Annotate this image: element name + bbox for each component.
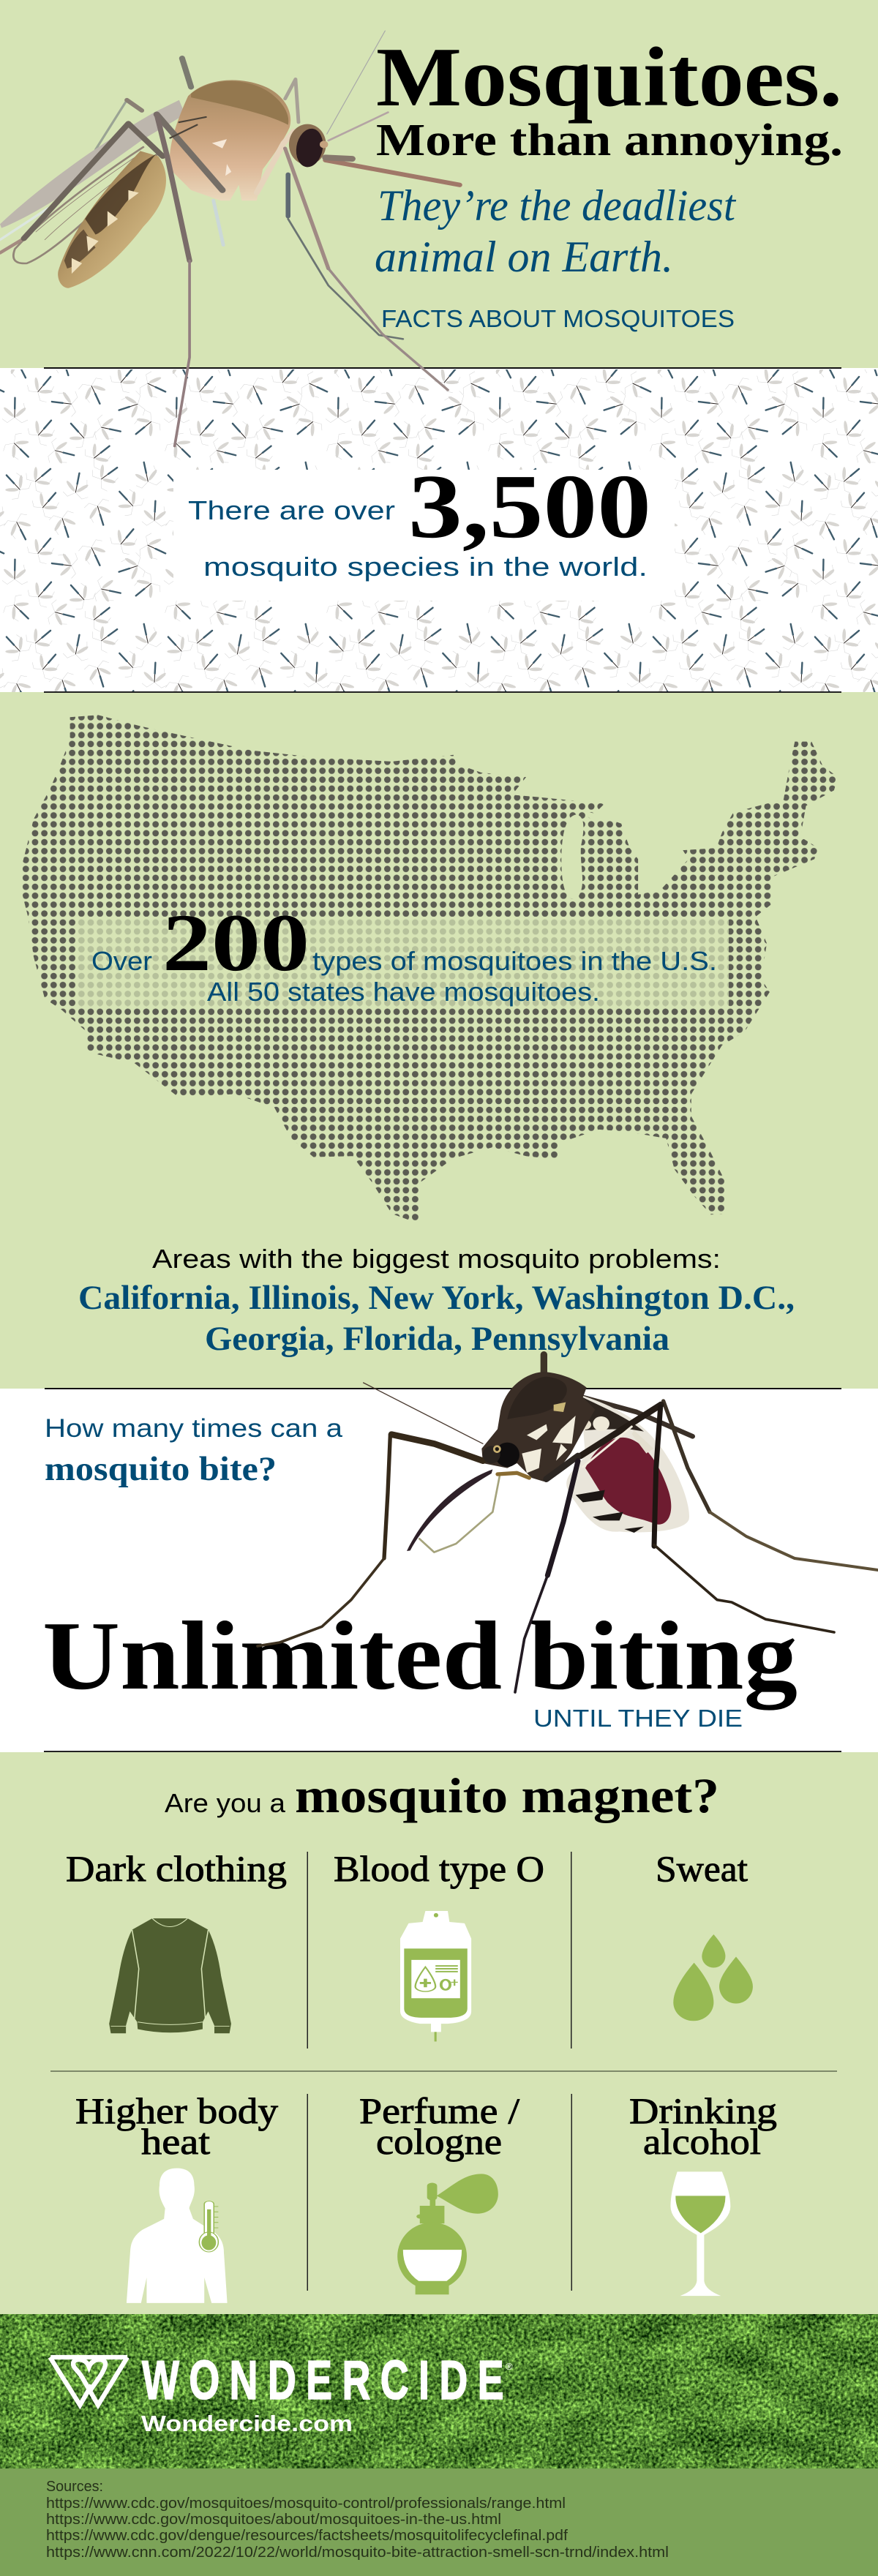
question line 2: mosquito bite? — [45, 1450, 277, 1488]
icon: sweatshirt — [109, 1918, 231, 2033]
tagline line 1: They’re the deadliest — [378, 181, 736, 230]
stat number: 200 — [162, 898, 309, 988]
sources heading: Sources: — [46, 2479, 103, 2495]
label: dark clothing: Dark clothing — [66, 1848, 287, 1889]
stat lead text: Over — [91, 946, 152, 976]
question line 1: How many times can a — [45, 1414, 343, 1443]
icon: blood-fed mosquito photo illustration — [258, 1355, 878, 1692]
heading: mosquito magnet? — [295, 1768, 719, 1823]
source link 2: https://www.cdc.gov/mosquitoes/about/mosquitoes-in-the-us.html — [46, 2512, 501, 2528]
source link 1: https://www.cdc.gov/mosquitoes/mosquito-control/professionals/range.html — [46, 2496, 566, 2512]
logo: Wondercide mark — [50, 2357, 127, 2405]
subtitle: More than annoying. — [376, 116, 843, 165]
label: perfume / cologne — [359, 2090, 519, 2162]
headline: Unlimited biting — [42, 1601, 798, 1711]
rule: below species — [44, 691, 841, 693]
panel: sources — [0, 2468, 878, 2576]
logo: wordmark: WONDERCIDE — [142, 2349, 504, 2411]
label: sweat: Sweat — [656, 1848, 748, 1889]
rule: above biting section — [45, 1388, 841, 1389]
headline suffix: UNTIL THEY DIE — [533, 1705, 743, 1732]
icon: mosquito photo illustration, tan — [0, 31, 459, 446]
rule: below biting section — [44, 1751, 841, 1752]
icon: blood bag — [400, 1911, 471, 2041]
tagline line 2: animal on Earth. — [375, 233, 673, 281]
icon: perfume bottle — [397, 2174, 498, 2294]
label: higher body heat — [75, 2090, 278, 2162]
heading: problem areas: Areas with the biggest mosquito problems: — [152, 1244, 721, 1274]
section label: FACTS ABOUT MOSQUITOES — [381, 305, 735, 332]
title: Mosquitoes. — [376, 31, 842, 124]
stat caption: types of mosquitoes in the U.S. — [312, 946, 717, 976]
state list line 1: California, Illinois, New York, Washington D.C., — [78, 1279, 795, 1317]
stat caption line 2: All 50 states have mosquitoes. — [207, 977, 600, 1007]
stat: 3,500 species — [188, 457, 651, 582]
label: higher body heat: Higher body — [75, 2090, 278, 2131]
icon: body with thermometer — [127, 2168, 228, 2303]
stat: 200 types — [91, 898, 717, 1007]
state list line 2: Georgia, Florida, Pennsylvania — [205, 1320, 669, 1358]
stat number: 3,500 — [408, 457, 651, 557]
label: drinking alcohol: Drinking — [629, 2090, 777, 2131]
icon: sweat drops — [673, 1934, 753, 2021]
logo: registered mark: ® — [506, 2361, 513, 2372]
stat caption: mosquito species in the world. — [203, 552, 648, 582]
chart: dotted US map — [22, 715, 836, 1220]
panel: mosquito magnet — [50, 1768, 837, 2303]
source link 4: https://www.cnn.com/2022/10/22/world/mosquito-bite-attraction-smell-scn-trnd/index.html — [46, 2545, 669, 2561]
label: drinking alcohol — [629, 2090, 777, 2162]
stat lead text: There are over — [188, 495, 395, 525]
icon: wine glass — [670, 2171, 730, 2296]
source link 3: https://www.cdc.gov/dengue/resources/factsheets/mosquitolifecyclefinal.pdf — [46, 2528, 568, 2544]
label: perfume / cologne: cologne — [376, 2121, 502, 2162]
label: blood type: Blood type O — [334, 1848, 544, 1889]
rule: top header — [44, 367, 841, 369]
label: drinking alcohol: alcohol — [643, 2121, 761, 2162]
label: perfume / cologne: Perfume / — [359, 2090, 519, 2131]
label: higher body heat: heat — [141, 2121, 210, 2162]
website: Wondercide.com — [141, 2411, 353, 2436]
panel: grass footer — [0, 2314, 878, 2468]
heading lead: Are you a — [165, 1788, 286, 1818]
panel: species pattern band — [0, 368, 878, 692]
panel: unlimited biting background — [0, 1389, 878, 1752]
